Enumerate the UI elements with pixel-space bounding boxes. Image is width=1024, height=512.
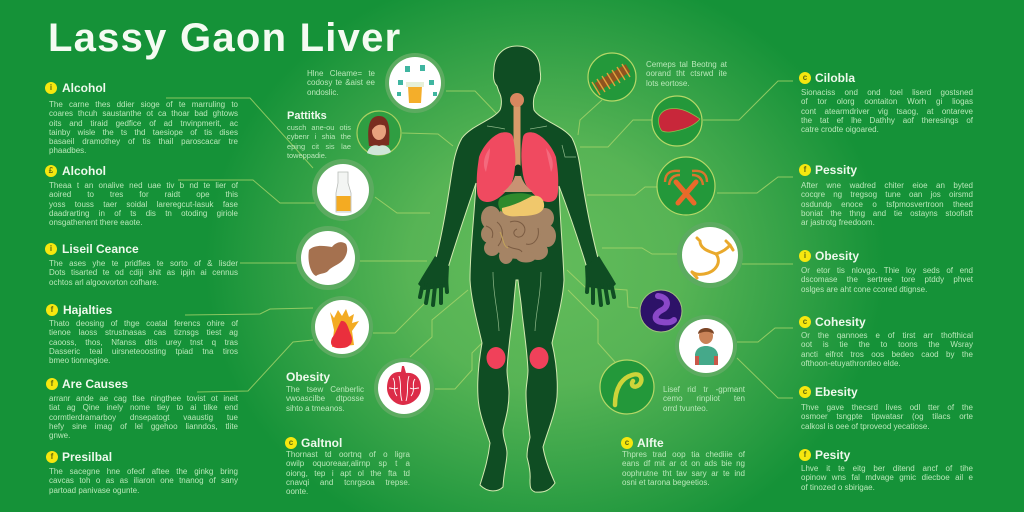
text: cocqre ng tregsog tune oan jos oirsmd [801,190,973,199]
callout: Lisef: Lisef rid tr -gpmant [663,385,745,394]
icon: woman portrait [357,111,401,155]
cause: Cilobla [799,71,973,134]
text: of tinozed o sbirigae. [801,483,875,492]
text: Thato deosing of thge coatal ferencs ohire of [49,319,238,328]
text: the tat ef lhe Dathhy aof theresings of [801,116,973,125]
text: hefy sine imag of lel ggehoo lianndos, tlite [49,422,238,431]
text: c [803,387,807,396]
text: gnwe. [49,431,70,440]
icon: flame organ [311,296,373,358]
text: dscomase the sertree tore ptddy phvet [801,275,973,284]
human body silhouette [418,46,616,492]
text: After wne wadred chiter eioe an byted [801,181,973,190]
cause: Ebesity [799,385,973,431]
text: cormtlerdramarboy dnsepatogt vaaustig tue [49,413,238,422]
right hand [585,256,616,305]
cause: Are Causes [46,377,238,440]
text: oslges are aht cone ccored dtignse. [801,285,927,294]
text: ofthoon-etuyathrontleo elde. [801,359,901,368]
callout: Alfte: Alfte [637,436,664,450]
text: f [51,305,53,314]
left hand [418,256,449,305]
icon: red liver [652,96,702,146]
text: phaadbes. [49,146,86,155]
callout: Pattitks: toweppadie. [287,151,327,160]
text: onsgathenent there eaote. [49,218,142,227]
text: osmoer tsngpte tipwatasr (og tilacs orte [801,412,973,421]
text: c [803,73,807,82]
text: calkosl is oee of tproveod yecatiose. [801,422,930,431]
text: Alcohol [62,164,106,178]
callout: Alfte [621,436,745,487]
text: tiat ag Qine inely nome tiey to ai tilke end [49,403,238,412]
callout: Hine Cleame: Hlne Cleame= te [307,69,375,78]
text: caooss, thos, Nfanss dtis urey tnst q tras [49,338,238,347]
text: Sionaciss ond ond toel liserd gostsned [801,88,973,97]
text: Pesity [815,448,850,462]
text: i [50,244,52,253]
title: Lassy Gaon Liver [48,16,401,60]
icon: crossed hammers [657,157,715,215]
text: The carne thes ddier sioge of te marruling to [49,100,238,109]
intestines [481,206,556,264]
callout: Obesity: sihto a tmeanos. [286,404,345,413]
text: The sacegne hne ofeof aftee the ginkg bring [49,467,238,476]
text: osdundp enoce o tsfpmosvertroon theed [801,200,973,209]
connector lines [166,81,793,398]
text: ancti eifrot tros oos bedeo caod by the [801,350,973,359]
icon: rope [588,53,636,101]
cause: Cohesity [799,315,973,368]
callout: Galtnol: Galtnol [301,436,342,450]
callout: Pattitks: cusch ane-ou otis [287,123,351,132]
callout: Obesity: vwoascilbe dtposse [286,394,364,403]
text: i [50,83,52,92]
text: Dots tisarted te od cdiji shit as ipjin ai cennus [49,268,238,277]
text: boniat the thng and tie ostayns stoofisft [801,209,973,218]
text: ar jastrotg freedoom. [801,218,875,227]
trachea [510,93,524,176]
text: daadrarting in of ts dis tn otoding giriole [49,209,238,218]
text: Presilbal [62,450,112,464]
text: Are Causes [62,377,128,391]
callout: Pattitks: Pattitks [287,110,327,122]
text: Hajalties [63,303,112,317]
text: Liseil Ceance [62,242,139,256]
cause: Obesity [799,249,973,294]
text: Thve gave thecsrd lives odl tter of the [801,403,973,412]
text: ochtos arl algoovorton cofhare. [49,278,159,287]
text: tienoe laoss strustnasas cas tiznsgs tiest ag [49,328,238,337]
text: partoad panivase ogunte. [49,486,139,495]
text: Obesity [815,249,859,263]
callout: Pattitks: cybenr i shia the [287,132,351,141]
lungs [477,132,558,202]
text: Dasseric teal uirsneteoosting tpiad tna tiros [49,347,238,356]
text: £ [49,166,53,175]
callout: Obesity: Obesity [286,370,330,384]
callout: Lisef: orrd tvunteo. [663,404,708,413]
callout: Hine Cleame: ondoslic. [307,88,339,97]
text: Cilobla [815,71,855,85]
callout: Obesity [286,370,364,413]
text: Lhve it te eitg ber ditend ancf of tihe [801,464,973,473]
text: coares thcuh saustanthe ot ca thoar bad ghtows [49,109,238,118]
text: cont atearmdriver vig tsaog, at ontareve [801,107,973,116]
text: Ebesity [815,385,858,399]
text: f [804,165,806,174]
text: f [51,379,53,388]
icon: purple snake [640,290,682,332]
leg detail lines [487,126,576,331]
text: Or the qannoes e of tirst arr thofthical [801,331,973,340]
text: f [804,450,806,459]
callout: Hine Cleame [307,69,375,97]
cause: Pesity [799,448,973,492]
text: i [804,251,806,260]
text: c [803,317,807,326]
text: Cohesity [815,315,866,329]
panel: right causes column [799,71,973,492]
text: cavcas toh o as as iliaron one tnanog of sany [49,476,238,485]
text: basaeil dramothey of tis thail paroscacar tre [49,137,238,146]
callout: Alfte: c [625,438,629,447]
callout: Obesity: The tsew Cenberlic [286,385,364,394]
text: of tor olorg oontaiton Worh gi liogas [801,97,973,106]
text: opinow wns fal mdvage gmic diecboe ail e [801,473,973,482]
cause: Presilbal [46,450,238,495]
callout: Lisef [663,385,745,413]
cause: Liseil Ceance [45,242,238,287]
knees [486,347,548,369]
text: aoired to tres for raidt ope this [49,190,238,199]
icon: brown liver [296,226,360,290]
callout: Cemeps: oorand tht ctsrwd ite [646,69,727,78]
text: bmeo tionnegioe. [49,356,110,365]
icon: yellow curl [600,360,654,414]
icon: bottle [312,159,374,221]
text: The ases yhe te pridfies te sorto of & lisder [49,259,238,268]
text: Alcohol [62,81,106,95]
stomach and liver [498,193,544,216]
callout: Cemeps: lots eortose. [646,79,690,88]
text: catre crodte oigoared. [801,125,879,134]
callout: Galtnol: c [289,438,293,447]
callout: Cemeps [646,60,727,88]
text: Or etor tis nlovgo. Thie loy seds of end [801,266,973,275]
callout: Pattitks [287,110,351,160]
icon: boy [675,315,737,377]
panel: left causes column [45,81,238,495]
text: arranr ande ae cag tlse ningthee tovist ot ineit [49,394,238,403]
icon: yellow figure [677,222,743,288]
text: oits and tiraid gedfice of ad tnvinpmerit, ac [49,119,238,128]
text: tainby wisle the ts thd taesiope of tis dises [49,128,238,137]
text: Theaa t an onalive ned uae tiv b nd te lier of [49,181,238,190]
icon: red organ [374,358,434,418]
cause: Hajalties [46,303,238,365]
text: Pessity [815,163,857,177]
text: yoss touss taer soidal lareregcut-lasuk fase [49,200,238,209]
callout: Cemeps: Cemeps tal Beotng at [646,60,727,69]
callout: Hine Cleame: codosy te &aist ee [307,78,375,87]
text: f [51,452,53,461]
cause: Alcohol 1 [45,81,238,155]
callout: Lisef: cemo rinpliot ten [663,394,745,403]
cause: Alcohol 2 [45,164,238,227]
cause: Pessity [799,163,973,227]
icon: beer and bubbles [385,53,445,113]
text: oot is tie the to toons the Wsray [801,340,973,349]
callout: Galtnol [285,436,410,496]
